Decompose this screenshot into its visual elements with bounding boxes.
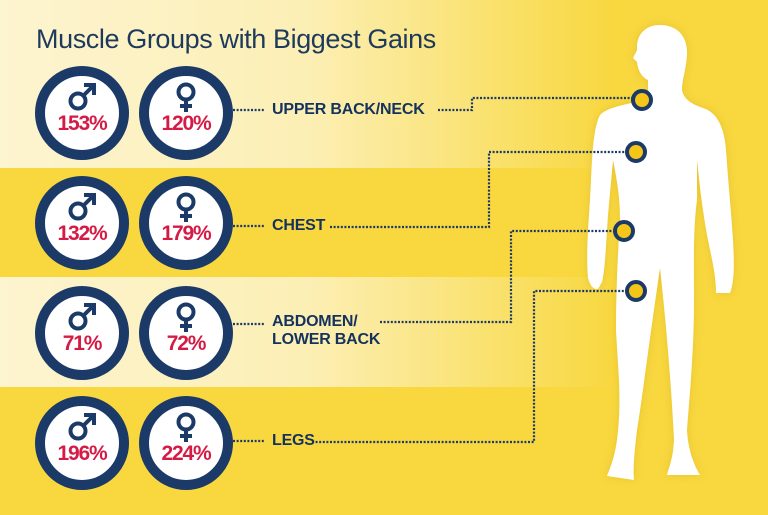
row: chest [35,176,326,270]
row: legs [35,396,315,490]
connector lines [233,98,634,442]
row: legs: 196% [58,442,106,465]
row: abdomen: 71% [63,332,101,355]
row: upper back/neck [35,66,425,160]
row: legs: 224% [162,442,210,465]
title: Muscle Groups with Biggest Gains [36,24,436,54]
row: chest: 179% [162,222,210,245]
male stat: 153% [58,112,106,135]
row: abdomen: LOWER BACK [272,331,380,348]
body point markers [615,91,651,300]
row: abdomen: ABDOMEN/ [272,313,358,330]
male stat [35,66,129,160]
female stat: 120% [162,112,210,135]
row: legs: LEGS [272,432,315,449]
row: abdomen: 72% [167,332,205,355]
body figure [587,25,734,480]
row: chest: CHEST [272,217,325,234]
row: abdomen [35,286,380,380]
female stat [139,66,233,160]
label: UPPER BACK/NECK [272,101,425,118]
row: chest: 132% [58,222,106,245]
